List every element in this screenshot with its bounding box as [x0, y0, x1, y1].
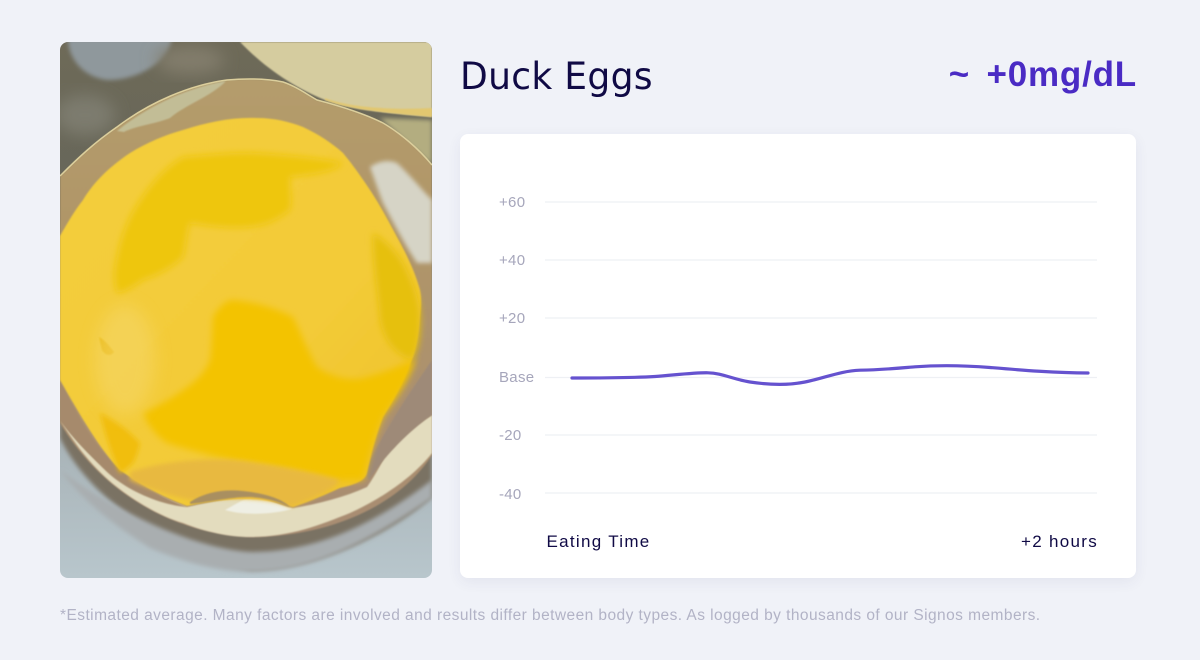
x axis labels: Eating Time: [546, 532, 651, 551]
value: glucose change: ~ +0mg/dL: [949, 55, 1137, 94]
white shell streak right: [370, 161, 432, 263]
y axis labels: +60: [499, 194, 525, 211]
pale highlight: [95, 305, 155, 415]
photo background: [60, 42, 432, 578]
egg shell outer: [60, 79, 432, 537]
x axis labels: [546, 532, 1098, 551]
panel: glucose chart: [460, 134, 1136, 578]
y axis labels: +20: [499, 310, 525, 327]
y axis labels: [499, 194, 534, 503]
brown inner shadow: [60, 380, 187, 507]
tray lower: [60, 400, 432, 570]
x axis labels: +2 hours: [1021, 532, 1098, 551]
y axis labels: -20: [499, 427, 522, 444]
y axis labels: +40: [499, 252, 525, 269]
y axis labels: Base: [499, 369, 534, 386]
photo: duck egg yolk in shell: [60, 42, 432, 578]
white chip in rim: [225, 497, 292, 514]
footnote: *Estimated average. Many factors are involved and results differ between body types. As logged by thousands of our Signos members.: [60, 607, 1041, 624]
y axis labels: -40: [499, 486, 522, 503]
yolk body: [60, 118, 421, 507]
deep yellow patches: [114, 153, 343, 293]
glucose curve: [572, 366, 1088, 384]
line chart: [499, 194, 1098, 551]
light shell chip: [117, 81, 226, 132]
orange lower film: [130, 460, 340, 507]
heading: Duck Eggs: Duck Eggs: [460, 55, 653, 98]
lower crack: [190, 490, 290, 507]
cream shell lower rim: [61, 415, 432, 537]
upper shell fragment: [240, 42, 432, 117]
